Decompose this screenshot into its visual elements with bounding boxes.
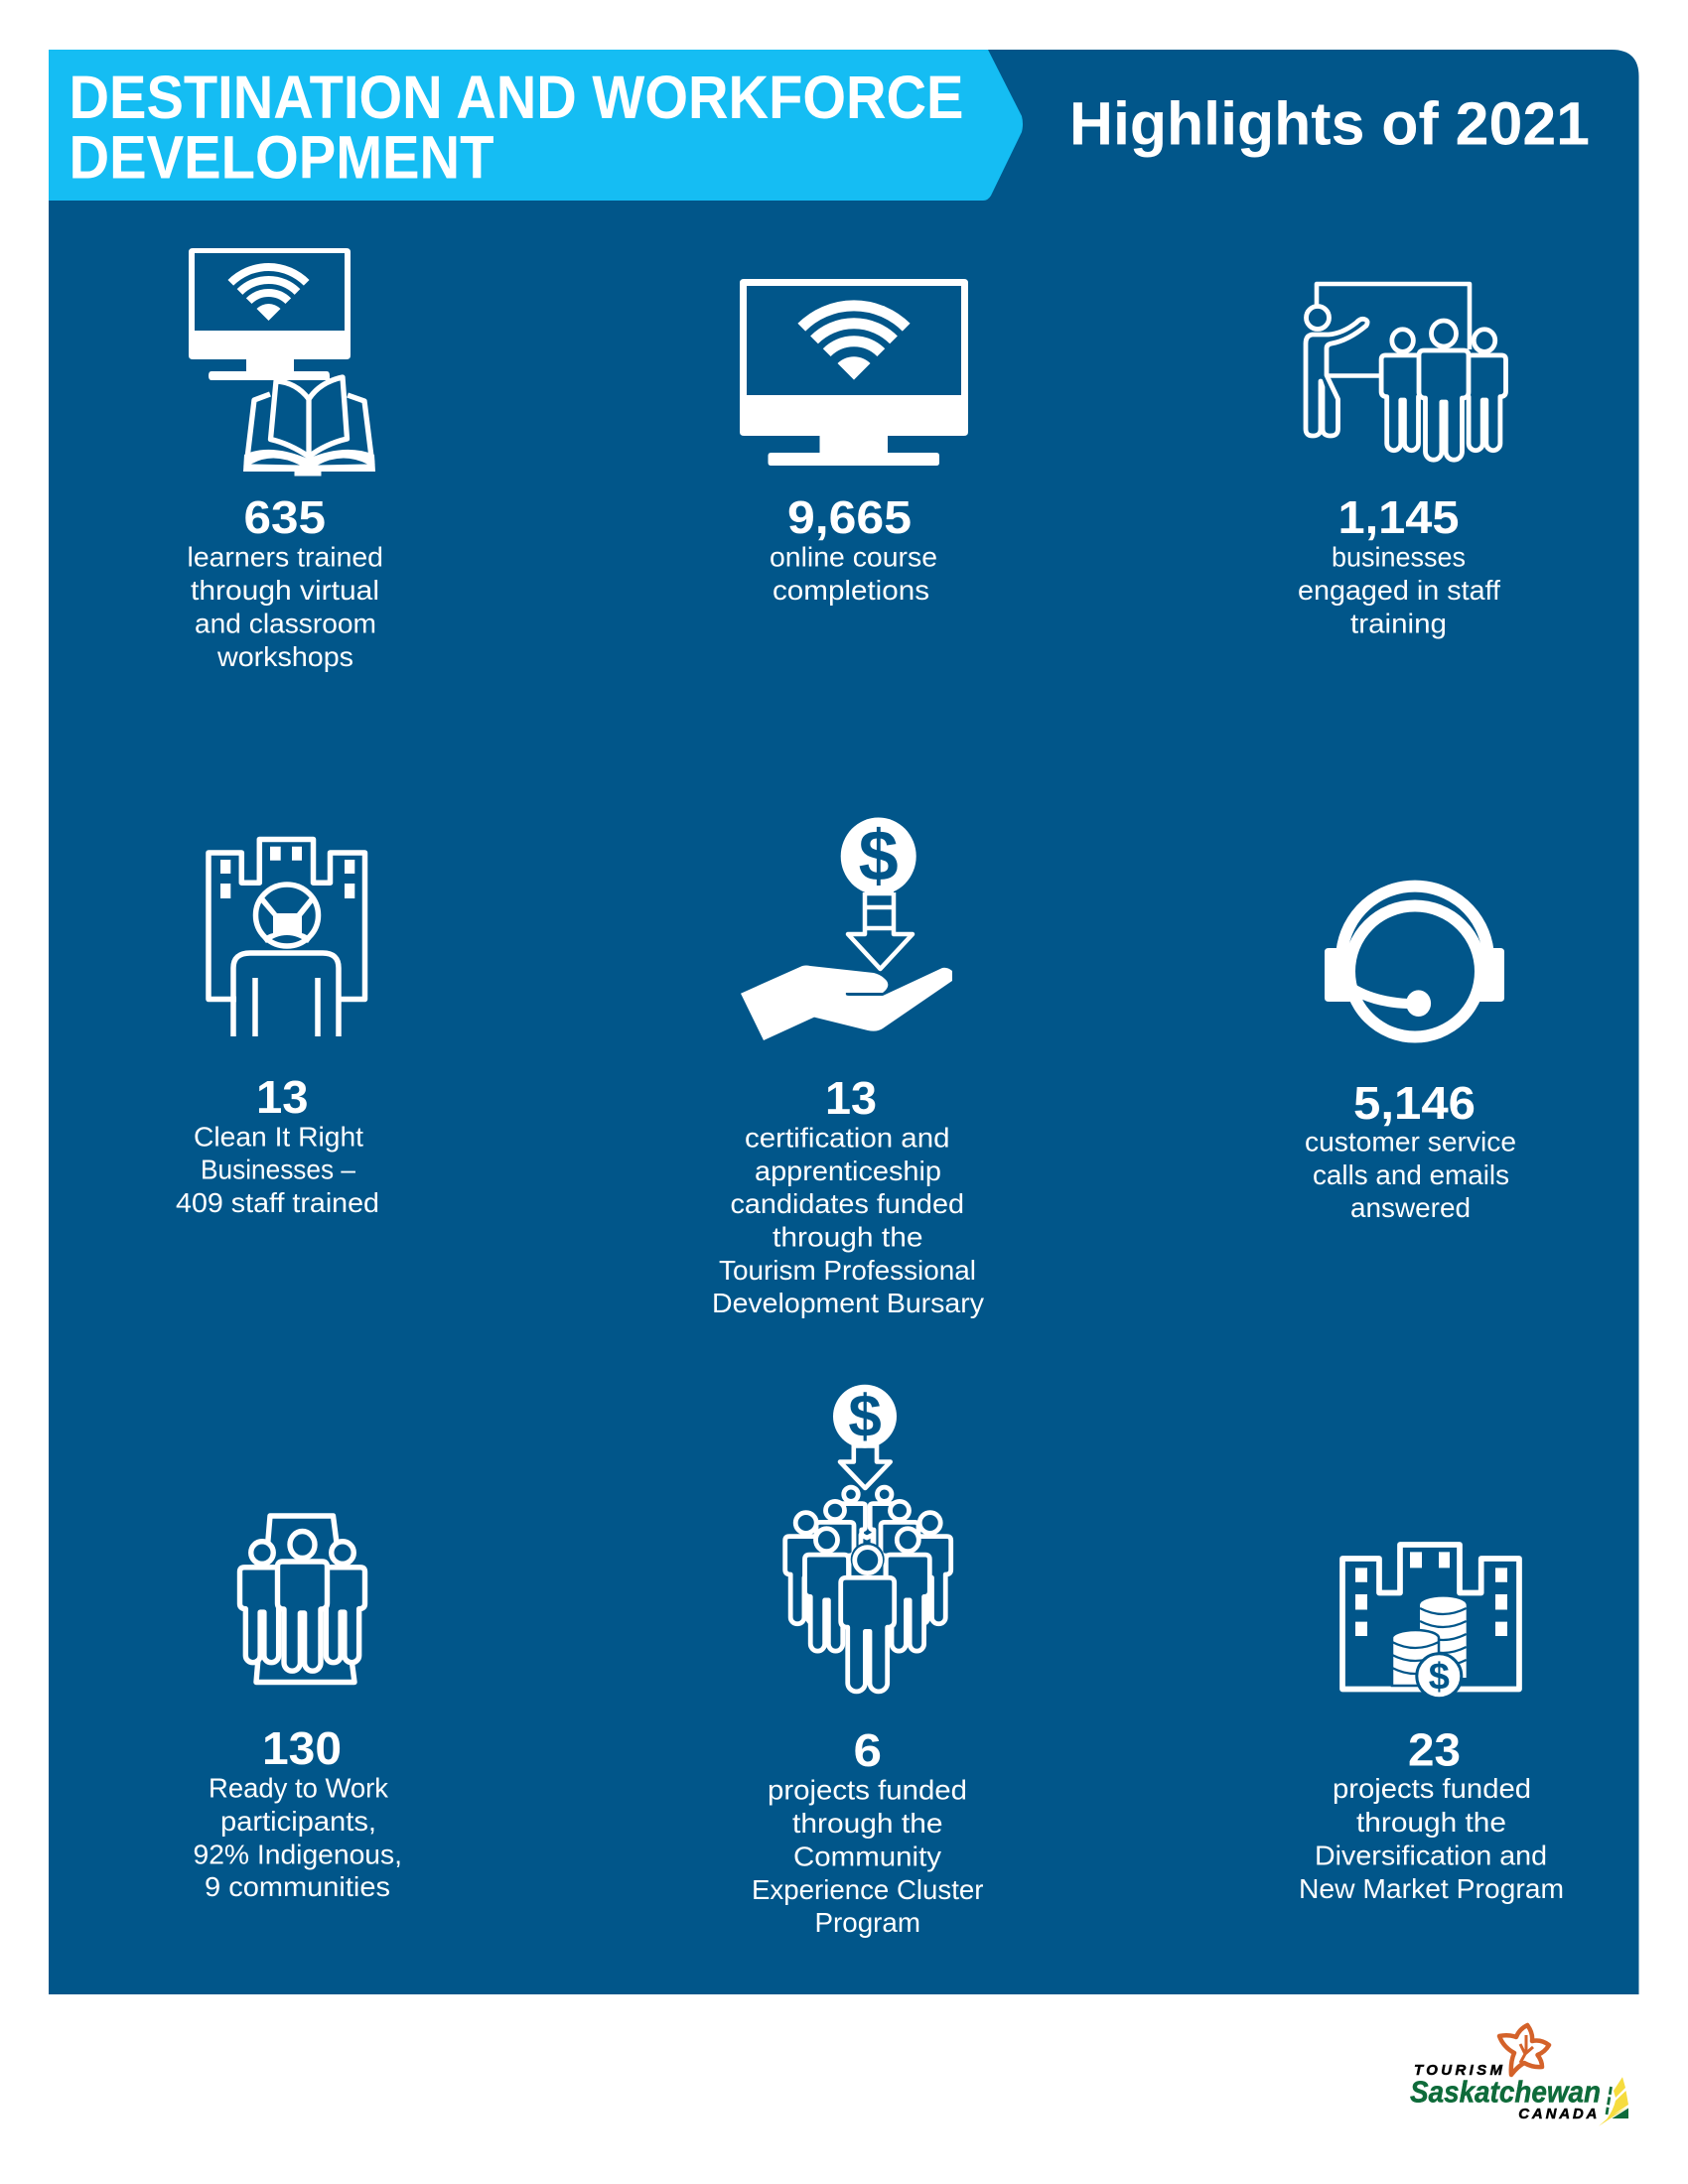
description: projects funded through Community Experience Cluster Program: through the (792, 1808, 943, 1839)
panel: 13 bursary candidates (712, 816, 984, 1318)
heading: destination and workforce development (70, 64, 963, 191)
description: learners trained: workshops (216, 641, 353, 672)
description: Ready to Work participants: 9 communities (205, 1871, 390, 1902)
banner: light blue arrow header (49, 50, 1023, 201)
description: learners trained: and classroom (195, 608, 376, 639)
description: learners trained: through virtual (191, 575, 379, 606)
panel: 23 diversification projects (1299, 1545, 1564, 1904)
description: Clean It Right businesses: Businesses – (201, 1154, 355, 1185)
description: projects funded through Diversification and New Market Program: Diversification and (1315, 1841, 1547, 1870)
icon: hotel with coin stacks: $ (1429, 1656, 1450, 1698)
description: certification and apprenticeship candidates: through the (773, 1221, 923, 1253)
description: customer service calls and emails: calls and emails (1313, 1160, 1509, 1190)
description: Clean It Right businesses: 409 staff trained (176, 1187, 379, 1218)
icon: coin, arrow and open hand (741, 816, 952, 1040)
number: 9,665: 9,665 (787, 491, 912, 543)
number: 5,146: 5,146 (1353, 1077, 1476, 1129)
description: certification and apprenticeship candidates: certification and (745, 1122, 949, 1154)
icon: masked worker in front of hotel (209, 840, 365, 1036)
description: projects funded through Community Experience Cluster Program: Community (793, 1841, 941, 1872)
heading: highlights of 2021: Highlights of 2021 (1069, 89, 1590, 157)
description: certification and apprenticeship candidates: apprenticeship (755, 1156, 941, 1186)
panel: 6 community cluster projects (752, 1383, 983, 1938)
description: certification and apprenticeship candidates: Development Bursary (712, 1288, 984, 1318)
description: Ready to Work participants: participants, (220, 1806, 376, 1837)
description: Ready to Work participants (193, 1773, 402, 1902)
description: Ready to Work participants: Ready to Work (209, 1773, 389, 1803)
description: businesses engaged in staff training (1298, 542, 1500, 639)
description: projects funded through Diversification and New Market Program: projects funded (1333, 1773, 1531, 1804)
panel: 9,665 course completions (740, 279, 968, 606)
panel: 635 learners (187, 248, 383, 672)
description: projects funded through Diversification and New Market Program: New Market Program (1299, 1873, 1564, 1904)
description: projects funded through Community Experience Cluster Program (752, 1775, 983, 1938)
description: certification and apprenticeship candidates (712, 1122, 984, 1318)
description: online course completions (770, 542, 937, 606)
description: projects funded through Community Experience Cluster Program: Experience Cluster (752, 1874, 983, 1905)
description: projects funded through Community Experience Cluster Program: projects funded (768, 1775, 967, 1805)
panel: 13 Clean It Right (176, 840, 379, 1218)
panel: 5,146 customer service (1305, 887, 1516, 1223)
description: Clean It Right businesses (176, 1122, 379, 1218)
description: customer service calls and emails: answered (1350, 1192, 1471, 1223)
description: projects funded through Community Experience Cluster Program: Program (814, 1907, 920, 1938)
description: certification and apprenticeship candidates: candidates funded (731, 1188, 964, 1219)
description: Ready to Work participants: 92% Indigenous, (193, 1839, 402, 1870)
number: 23: 23 (1408, 1723, 1461, 1775)
description: projects funded through Diversification and New Market Program: through the (1356, 1807, 1506, 1838)
heading: destination and workforce development: DEVELOPMENT (70, 123, 494, 191)
description: customer service calls and emails: customer service (1305, 1126, 1516, 1158)
number: 13: 13 (256, 1071, 308, 1123)
description: learners trained (187, 542, 383, 672)
number: 1,145: 1,145 (1338, 491, 1460, 543)
icon: hotel with coin stacks (1342, 1545, 1519, 1699)
icon: wheat sail (1599, 2077, 1628, 2126)
icon: orange lily (1499, 2025, 1549, 2075)
icon: headset (1325, 887, 1504, 1036)
icon: coin, arrow and group of people: $ (848, 1383, 882, 1449)
wordmark: Saskatchewan: Saskatchewan (1410, 2074, 1601, 2109)
description: online course completions: completions (773, 575, 929, 606)
number: 13: 13 (825, 1072, 877, 1124)
description: online course completions: online course (770, 542, 937, 572)
icon: three people in front of Saskatchewan (240, 1516, 365, 1682)
number: 6: 6 (854, 1724, 882, 1776)
description: certification and apprenticeship candidates: Tourism Professional (719, 1255, 976, 1286)
heading: destination and workforce development: DESTINATION AND WORKFORCE (70, 64, 963, 131)
description: businesses engaged in staff training: businesses (1332, 542, 1466, 572)
icon: coin, arrow and open hand: $ (859, 816, 899, 895)
description: Clean It Right businesses: Clean It Right (194, 1122, 363, 1152)
panel: 130 Ready to Work (193, 1516, 402, 1902)
panel: 1,145 businesses (1298, 284, 1505, 639)
description: projects funded through Diversification and New Market Program (1299, 1773, 1564, 1904)
logo: Tourism Saskatchewan Canada (1410, 2025, 1628, 2126)
number: 635: 635 (244, 491, 326, 543)
wordmark: CANADA: CANADA (1518, 2106, 1597, 2122)
number: 130: 130 (262, 1722, 342, 1774)
description: businesses engaged in staff training: training (1350, 608, 1447, 639)
description: learners trained: learners trained (187, 542, 383, 572)
wordmark: TOURISM: TOURISM (1414, 2062, 1503, 2079)
icon: presenter with audience (1306, 284, 1505, 460)
description: businesses engaged in staff training: engaged in staff (1298, 575, 1500, 606)
icon: monitor and open book (189, 248, 375, 477)
icon: monitor with wifi (740, 279, 968, 466)
description: customer service calls and emails (1305, 1126, 1516, 1223)
icon: coin, arrow and group of people (785, 1383, 951, 1692)
